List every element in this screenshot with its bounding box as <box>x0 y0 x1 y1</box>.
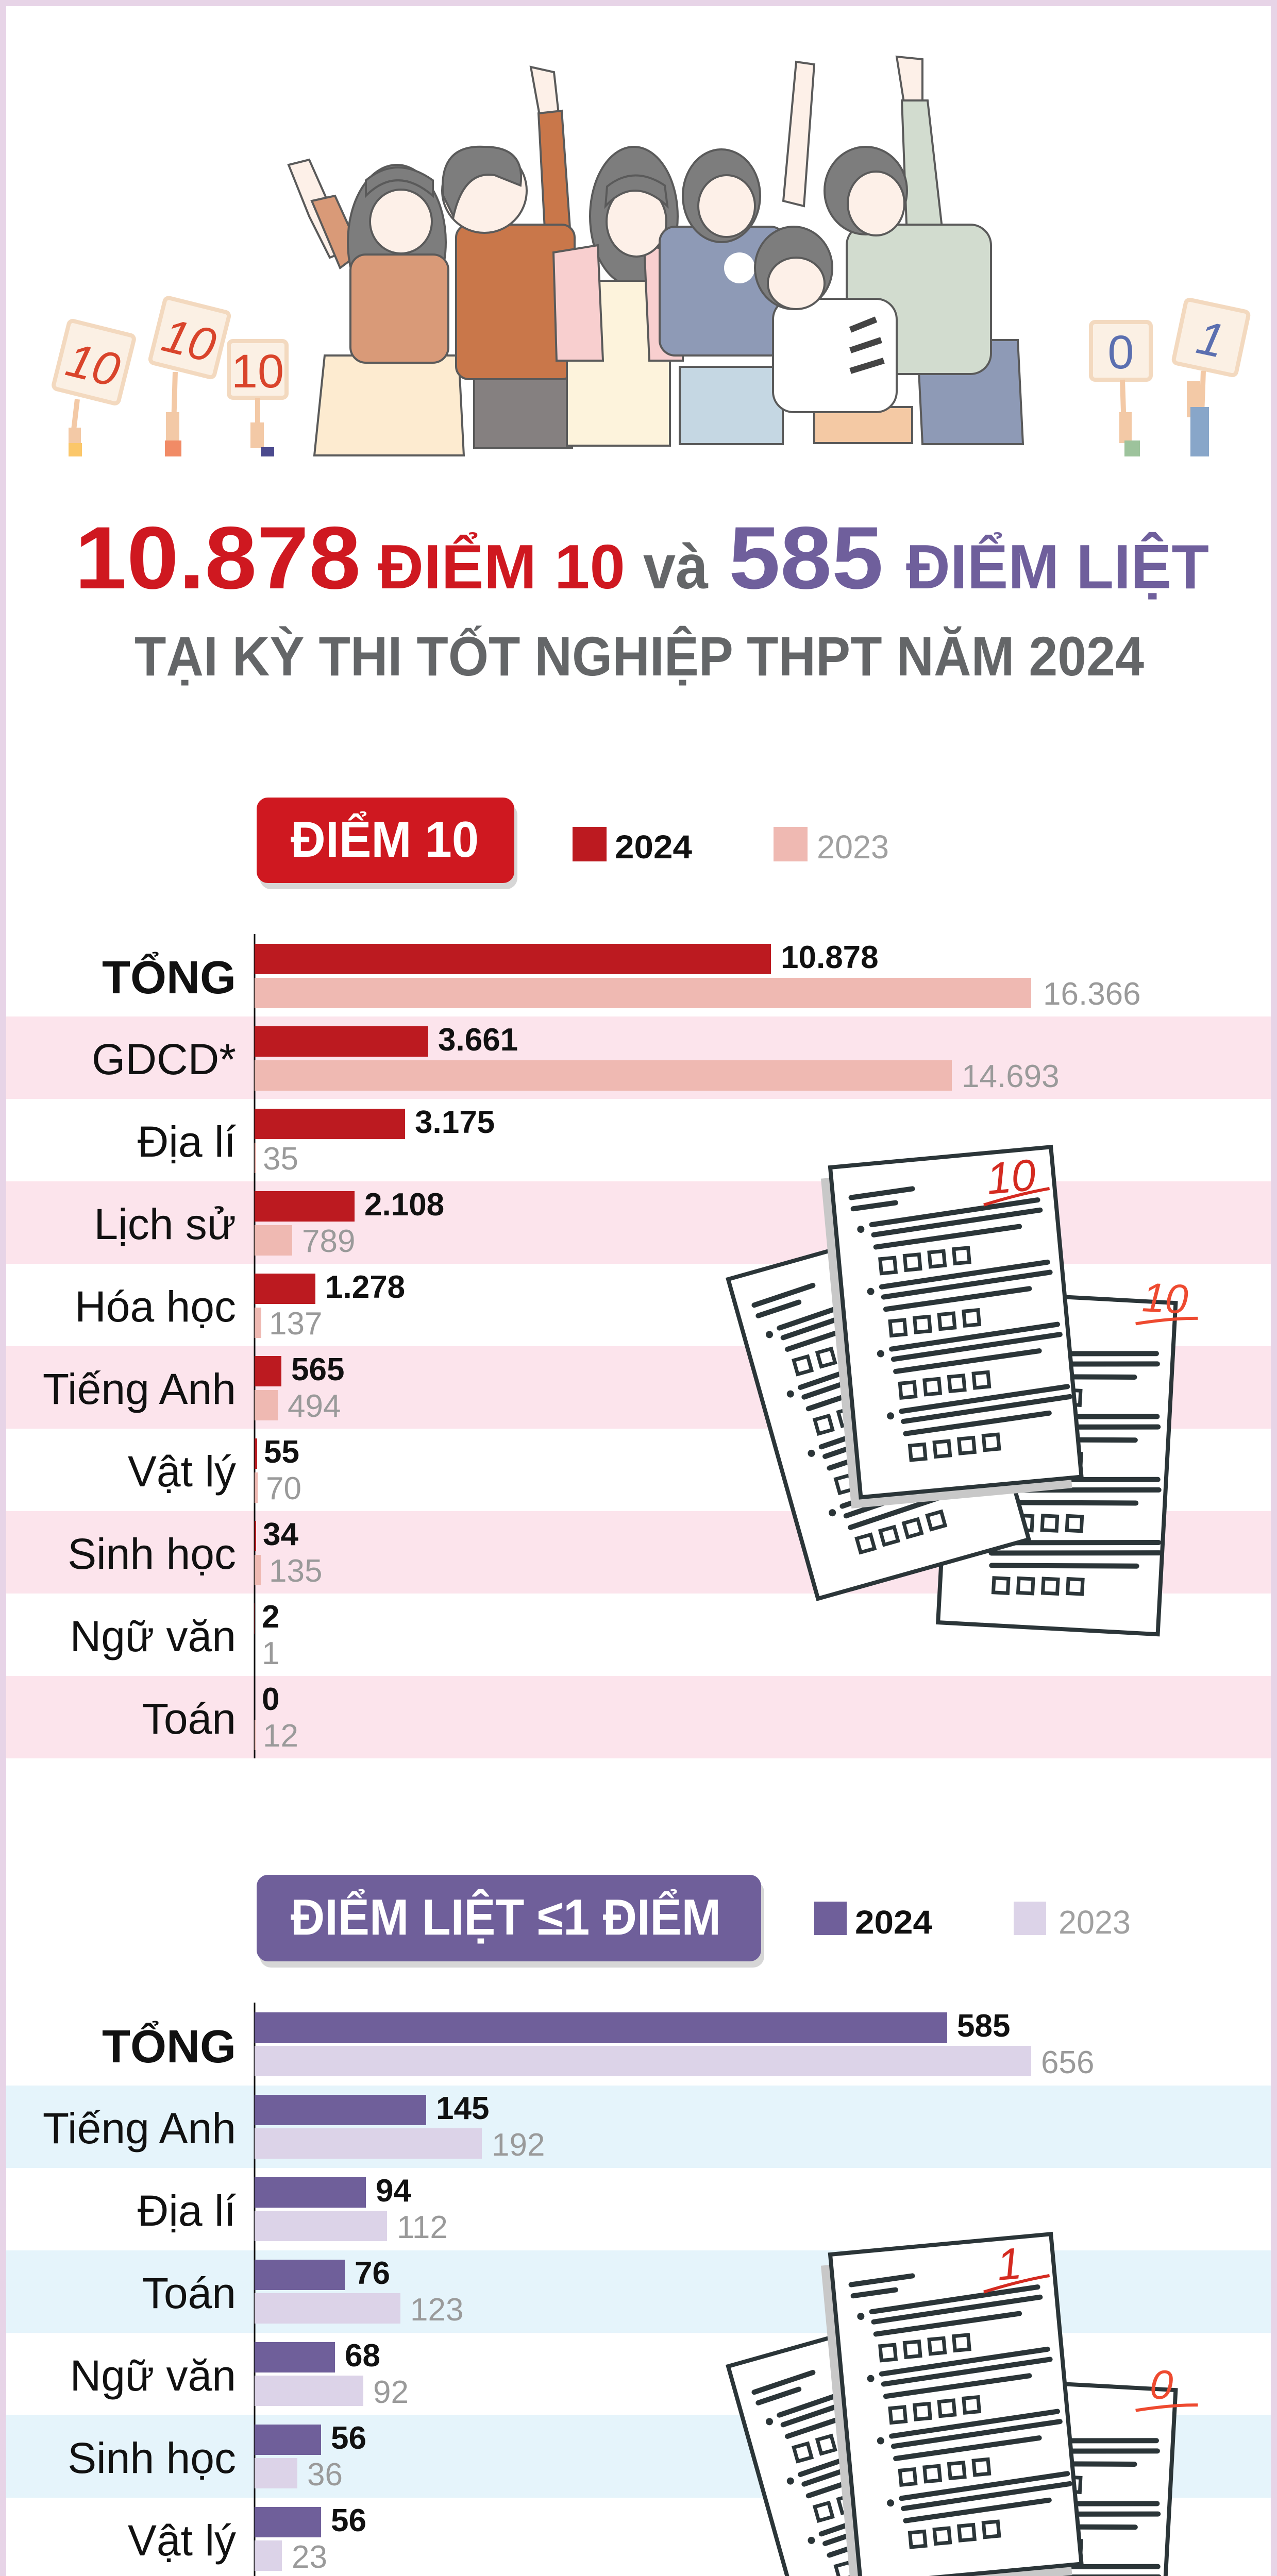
row labels: GDCD* <box>92 1035 236 1083</box>
icon: placards 0 and 1: 0 <box>1107 326 1134 379</box>
icon: placards 10: 10 <box>157 309 221 372</box>
values 2023: 23 <box>292 2539 327 2575</box>
bars 2024 <box>255 2012 947 2576</box>
values 2024: 565 <box>291 1352 344 1387</box>
heading button: ĐIỂM 10: ĐIỂM 10 <box>291 811 479 868</box>
row labels: Sinh học <box>68 2434 236 2482</box>
row labels: Vật lý <box>128 2516 236 2565</box>
illustration: exam papers 1/0 <box>728 2234 1200 2576</box>
values 2023: 789 <box>302 1224 355 1259</box>
axis <box>254 2003 256 2576</box>
title: 585 <box>729 509 883 607</box>
illustration: exam papers 10 <box>728 1147 1200 1634</box>
bars 2024 <box>255 944 771 1634</box>
title: 10.878 <box>75 509 361 607</box>
title: ĐIỂM LIỆT <box>906 532 1209 602</box>
row labels: Địa lí <box>138 2187 236 2235</box>
row labels <box>43 951 236 1743</box>
heading button: ĐIỂM LIỆT: ĐIỂM LIỆT ≤1 ĐIỂM <box>291 1889 721 1945</box>
person: girl pink cardigan <box>553 147 684 446</box>
person: striped sweater boy <box>755 227 912 443</box>
values 2023: 112 <box>397 2210 448 2245</box>
values 2024: 55 <box>264 1434 299 1470</box>
values 2023: 494 <box>288 1388 341 1424</box>
illustration: exam papers 1/0: 1 <box>995 2239 1023 2290</box>
row labels: Tiếng Anh <box>43 1365 236 1413</box>
legend: 2024 <box>855 1904 932 1941</box>
icon: placards 0 and 1: 1 <box>1192 311 1229 368</box>
values 2023: 14.693 <box>962 1059 1060 1094</box>
legend <box>573 827 889 866</box>
row labels: Lịch sử <box>94 1200 236 1248</box>
legend <box>814 1902 1131 1941</box>
values 2023: 656 <box>1041 2045 1094 2080</box>
row labels: Sinh học <box>68 1530 236 1578</box>
row bands <box>6 1016 1271 1758</box>
values 2023: 12 <box>263 1718 298 1754</box>
person: boy brown blazer <box>442 67 575 448</box>
row labels <box>43 2020 236 2576</box>
title <box>75 509 1209 607</box>
row labels: Toán <box>142 2269 236 2317</box>
row labels: Tiếng Anh <box>43 2104 236 2153</box>
person: blue t-shirt <box>660 62 814 444</box>
values 2024: 0 <box>262 1682 279 1717</box>
values 2023: 137 <box>269 1306 322 1342</box>
title: và <box>643 532 709 602</box>
values 2023: 192 <box>492 2127 545 2163</box>
row labels: TỔNG <box>102 2020 236 2073</box>
row labels: Địa lí <box>138 1117 236 1166</box>
values 2023: 123 <box>410 2292 463 2328</box>
icon: placards 10: 10 <box>61 333 125 397</box>
values 2024: 3.661 <box>438 1022 518 1058</box>
icon: placards 10 <box>53 297 287 456</box>
values 2023 <box>262 976 1141 1754</box>
row labels: TỔNG <box>102 951 236 1004</box>
row labels: Toán <box>142 1694 236 1743</box>
values 2024: 2 <box>262 1599 279 1635</box>
values 2024: 3.175 <box>415 1105 495 1140</box>
values 2024 <box>262 940 879 1717</box>
row labels: Hóa học <box>75 1282 236 1331</box>
legend: 2024 <box>615 828 692 866</box>
values 2024: 34 <box>263 1517 298 1552</box>
people group <box>289 57 1023 455</box>
icon: placards 0 and 1 <box>1091 299 1249 456</box>
row labels: Ngữ văn <box>70 2351 236 2400</box>
illustration: exam papers 10: 10 <box>1141 1274 1189 1323</box>
heading button: ĐIỂM 10 <box>257 798 517 889</box>
person: girl orange sweater <box>289 160 464 455</box>
row labels: Ngữ văn <box>70 1612 236 1660</box>
bars 2023 <box>255 2046 1031 2576</box>
values 2024: 56 <box>331 2503 366 2538</box>
illustration: exam papers 10: 10 <box>984 1150 1038 1204</box>
bars 2023 <box>255 978 1031 1750</box>
values 2024: 1.278 <box>325 1269 405 1305</box>
heading button: ĐIỂM LIỆT <box>257 1875 764 1968</box>
icon: placards 10: 10 <box>231 345 284 398</box>
axis <box>254 934 256 1758</box>
values 2024: 68 <box>345 2338 380 2374</box>
values 2023: 1 <box>262 1636 279 1671</box>
values 2023: 135 <box>269 1553 322 1589</box>
values 2023: 36 <box>307 2457 343 2493</box>
row bands <box>6 2086 1271 2576</box>
values 2024: 2.108 <box>364 1187 444 1223</box>
title: ĐIỂM 10 <box>378 532 625 602</box>
panel: điểm 10 chart <box>6 798 1271 1758</box>
values 2024 <box>293 2008 1010 2576</box>
values 2023: 16.366 <box>1043 976 1141 1012</box>
values 2024: 56 <box>331 2420 366 2456</box>
person: green hoodie <box>825 57 1023 444</box>
values 2023: 92 <box>373 2375 409 2410</box>
values 2023: 70 <box>266 1471 301 1506</box>
values 2024: 585 <box>957 2008 1010 2044</box>
illustration: exam papers 1/0: 0 <box>1149 2361 1174 2408</box>
panel: điểm liệt chart <box>6 1875 1271 2576</box>
values 2023: 35 <box>263 1141 298 1177</box>
legend: 2023 <box>817 828 889 866</box>
legend: 2023 <box>1058 1904 1131 1941</box>
subtitle: TẠI KỲ THI TỐT NGHIỆP THPT NĂM 2024 <box>135 625 1144 687</box>
values 2024: 76 <box>355 2256 390 2291</box>
values 2024: 10.878 <box>781 940 879 975</box>
values 2024: 145 <box>436 2091 489 2126</box>
values 2024: 94 <box>376 2173 411 2209</box>
row labels: Vật lý <box>128 1447 236 1496</box>
values 2023 <box>281 2045 1094 2576</box>
illustration: cheering students <box>53 57 1249 456</box>
